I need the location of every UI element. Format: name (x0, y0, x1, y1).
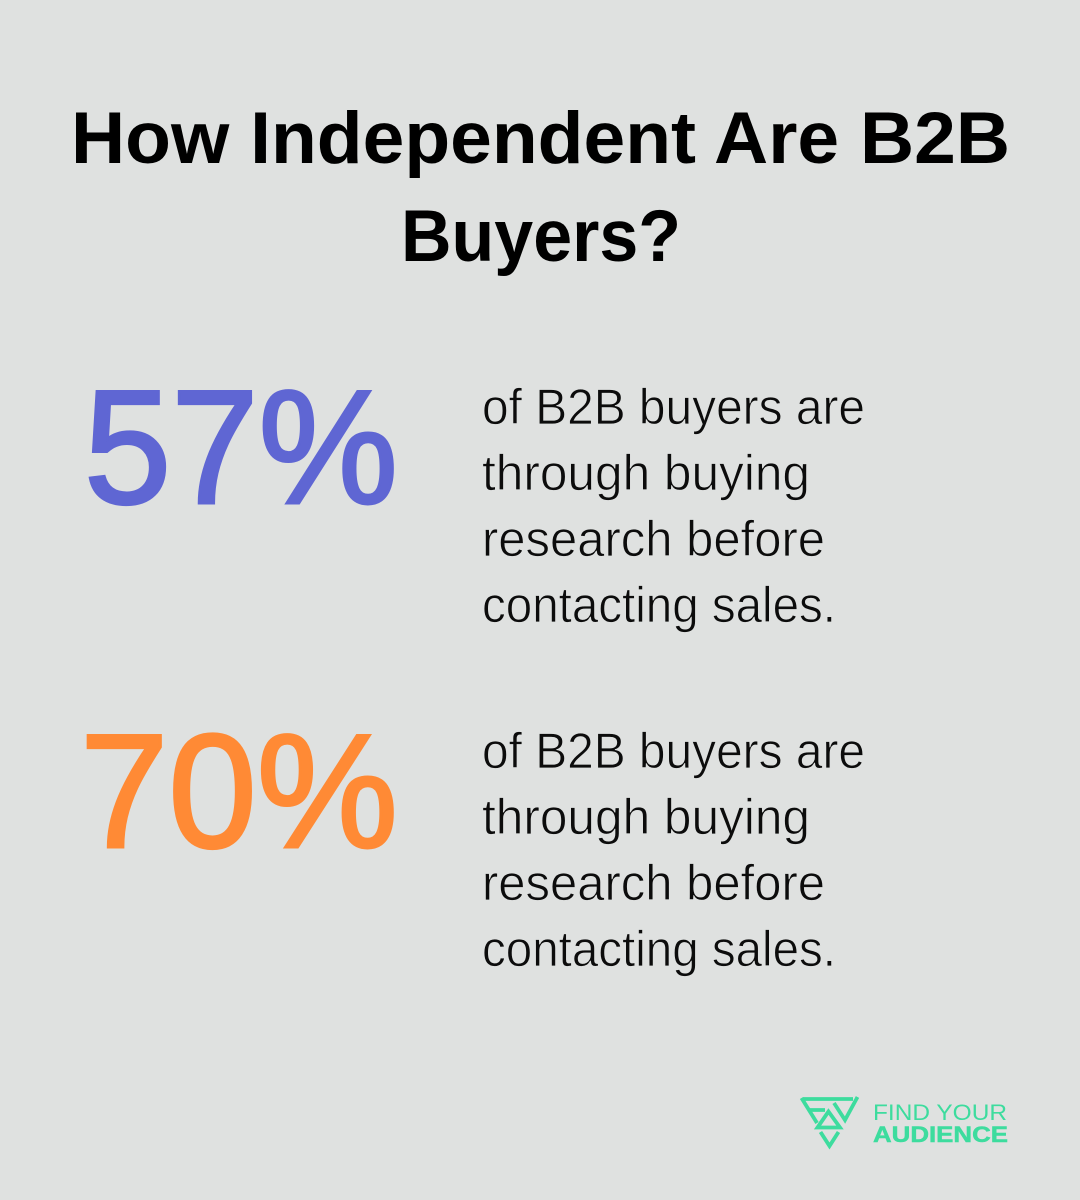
text block: 70% description: research before (482, 855, 825, 911)
stat: 70%: 70% (80, 701, 398, 882)
title: Buyers? (401, 196, 681, 277)
text block: 57% description: contacting sales. (482, 577, 836, 633)
text block: 57% description (482, 379, 865, 633)
stat: 57%: 57% (84, 357, 398, 538)
text block: 70% description (482, 723, 865, 977)
text block: 70% description: through buying (482, 789, 810, 845)
text block: 57% description: of B2B buyers are (482, 379, 865, 435)
text block: 70% description: of B2B buyers are (482, 723, 865, 779)
title: How Independent Are B2B (71, 98, 1010, 179)
title (71, 98, 1010, 277)
logo: Find Your Audience (802, 1097, 1008, 1147)
logo text (873, 1100, 1008, 1147)
text block: 70% description: contacting sales. (482, 921, 836, 977)
text block: 57% description: through buying (482, 445, 810, 501)
logo text: AUDIENCE (873, 1122, 1008, 1147)
icon: logo triangles (802, 1097, 858, 1146)
logo text: FIND YOUR (873, 1100, 1007, 1125)
text block: 57% description: research before (482, 511, 825, 567)
